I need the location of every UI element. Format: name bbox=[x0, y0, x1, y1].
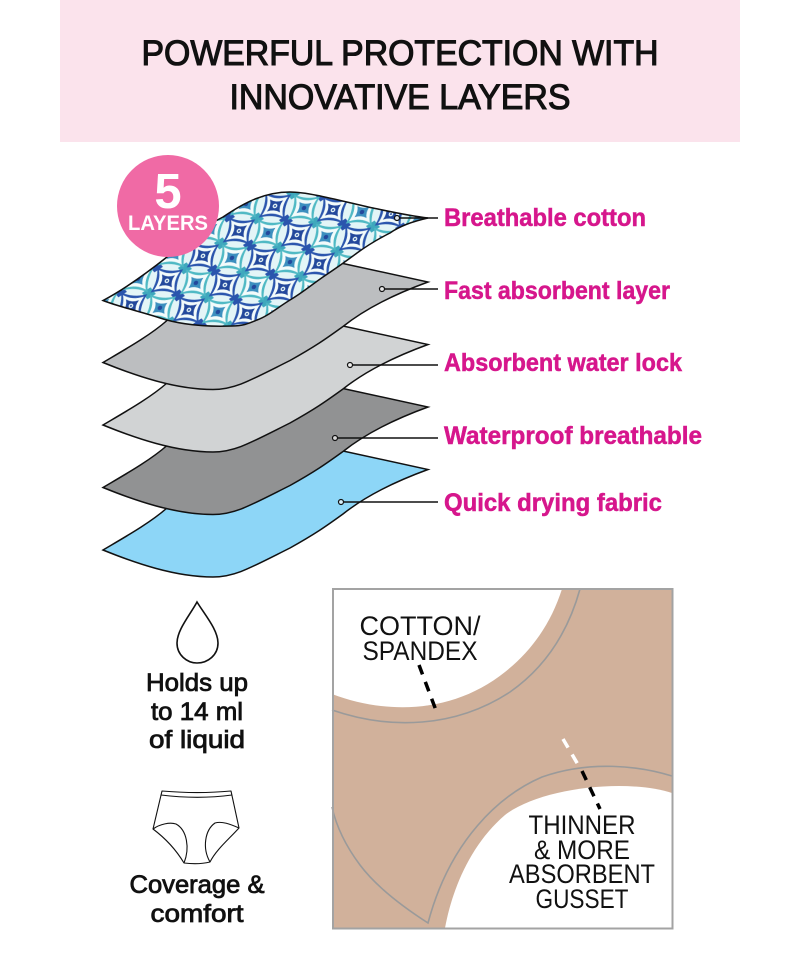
callout: absorbent water lock: Absorbent water lock bbox=[444, 349, 682, 377]
header panel bbox=[60, 0, 740, 142]
text: holds up to 14 ml of liquid: to 14 ml bbox=[151, 698, 243, 726]
label: cotton/spandex: SPANDEX bbox=[362, 636, 478, 666]
callout: waterproof breathable bbox=[332, 422, 702, 450]
badge: 5 layers bbox=[117, 155, 219, 257]
label: thinner and more absorbent gusset: THINNER bbox=[528, 810, 636, 840]
text: holds up to 14 ml of liquid: of liquid bbox=[149, 726, 245, 754]
badge: 5 layers: 5 bbox=[154, 165, 182, 219]
title bbox=[142, 34, 658, 117]
callout: breathable cotton: Breathable cotton bbox=[444, 204, 646, 232]
callout: quick drying fabric: Quick drying fabric bbox=[444, 489, 662, 517]
label: thinner and more absorbent gusset: GUSSET bbox=[536, 884, 628, 914]
dashed pointer: cotton/spandex bbox=[419, 665, 437, 713]
text: coverage and comfort: Coverage & bbox=[130, 871, 265, 899]
title: INNOVATIVE LAYERS bbox=[230, 78, 570, 117]
title: POWERFUL PROTECTION WITH bbox=[142, 34, 658, 73]
text: holds up to 14 ml of liquid: Holds up bbox=[146, 669, 248, 697]
badge: 5 layers: LAYERS bbox=[128, 212, 208, 235]
text: coverage and comfort: comfort bbox=[150, 900, 244, 928]
label: thinner and more absorbent gusset: ABSORBENT bbox=[509, 859, 655, 889]
leg opening bottom bbox=[445, 786, 672, 928]
layer: fast absorbent bbox=[103, 263, 428, 390]
label: cotton/spandex: COTTON/ bbox=[360, 611, 481, 641]
seam lines bbox=[332, 589, 672, 923]
label: thinner and more absorbent gusset: & MORE bbox=[534, 835, 630, 865]
label: thinner and more absorbent gusset bbox=[509, 810, 655, 914]
callout: fast absorbent layer: Fast absorbent layer bbox=[444, 277, 670, 305]
layer: quick drying fabric bbox=[103, 450, 428, 577]
text: holds up to 14 ml of liquid bbox=[146, 669, 248, 754]
label: cotton/spandex bbox=[360, 611, 481, 666]
dashed pointer: gusset bbox=[563, 739, 600, 809]
leg opening top bbox=[332, 589, 562, 707]
icon: water drop bbox=[177, 602, 218, 663]
text: coverage and comfort bbox=[130, 871, 265, 928]
panel: gusset close-up bbox=[332, 588, 673, 929]
layer: waterproof breathable bbox=[103, 388, 428, 514]
callout: absorbent water lock bbox=[348, 349, 682, 377]
callout: waterproof breathable: Waterproof breathable bbox=[444, 422, 702, 450]
layer: absorbent water lock bbox=[103, 325, 428, 452]
callout: quick drying fabric bbox=[338, 489, 662, 517]
icon: briefs bbox=[153, 791, 239, 864]
layer: breathable cotton pattern bbox=[103, 192, 428, 326]
